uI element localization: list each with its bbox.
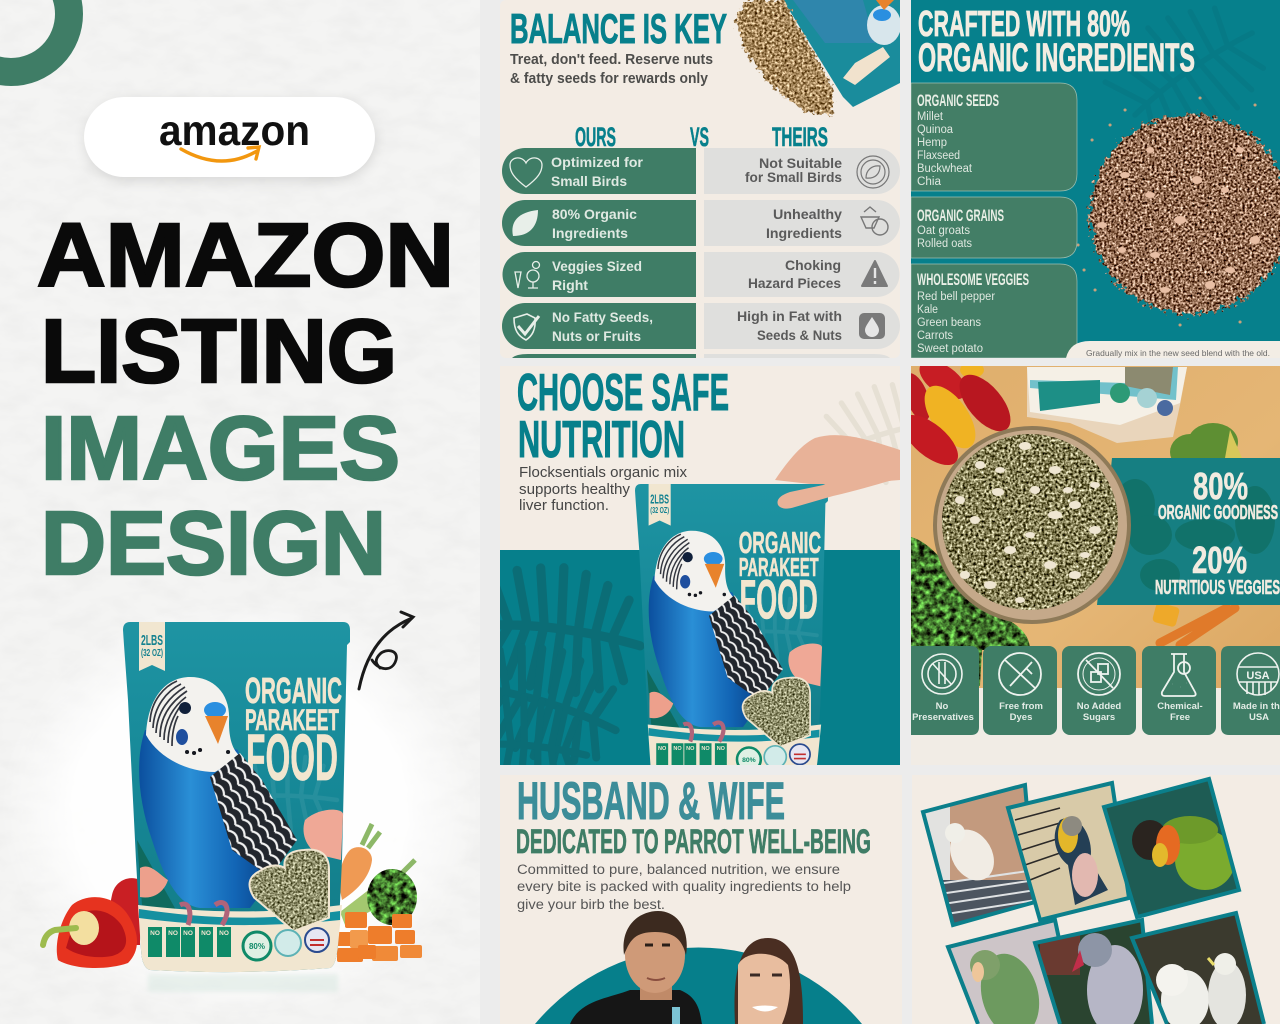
title: LISTING <box>41 302 397 402</box>
amazon wordmark: amazon <box>159 107 310 155</box>
arrow <box>359 612 413 689</box>
row 5 cut-off <box>512 354 890 358</box>
carrot <box>338 847 372 900</box>
panel background <box>500 0 900 358</box>
heading: CHOOSE SAFE <box>517 364 729 422</box>
card: no added sugars <box>1062 646 1136 735</box>
oats <box>955 442 1101 603</box>
palm shadows <box>462 558 649 800</box>
cream lower band <box>138 905 342 972</box>
weight tag: (32 OZ) <box>141 648 163 659</box>
box: wholesome veggies <box>911 264 1077 358</box>
parakeet <box>139 677 297 925</box>
feet <box>180 903 227 925</box>
body text: Flocksentials organic mix <box>519 465 688 481</box>
row 3 ours: Right <box>552 277 588 293</box>
pack title <box>245 670 342 794</box>
seed pile <box>735 0 834 115</box>
stats banner <box>1097 458 1280 605</box>
weight tag: 2LBS <box>141 632 163 649</box>
card: no preservatives <box>911 646 979 735</box>
body text: liver function. <box>519 498 609 514</box>
teal band <box>500 550 900 765</box>
pack title: ORGANIC <box>245 670 342 711</box>
red pepper behind <box>110 878 140 945</box>
head bars <box>150 681 187 746</box>
card: chemical-free: Free <box>1170 712 1190 723</box>
cere <box>204 702 226 718</box>
no-badge labels: NO <box>201 930 211 937</box>
panel background <box>911 0 1280 358</box>
ingredient list: Quinoa <box>917 124 954 136</box>
title: AMAZON <box>37 206 454 306</box>
veggie list <box>917 291 995 355</box>
icon: no bird <box>857 156 889 188</box>
body text: give your birb the best. <box>517 897 665 912</box>
row 4 ours: Nuts or Fruits <box>552 328 641 344</box>
ingredient list: Millet <box>917 111 944 123</box>
wing <box>210 753 297 877</box>
yellow pepper slice <box>1152 602 1180 628</box>
card: no added sugars: Sugars <box>1083 712 1115 723</box>
body text: every bite is packed with quality ingredients to help <box>517 879 851 894</box>
panel background <box>500 366 900 765</box>
box: organic grains: ORGANIC GRAINS <box>917 207 1004 225</box>
heading: BALANCE IS KEY <box>510 5 727 52</box>
row 2 ours: Ingredients <box>552 225 628 241</box>
ingredient list: Chia <box>917 176 942 188</box>
intro text: Treat, don't feed. Reserve nuts <box>510 52 713 68</box>
row 1 ours: Small Birds <box>551 173 627 189</box>
row 3 theirs: Hazard Pieces <box>748 275 841 291</box>
row 2 ours: 80% Organic <box>552 206 637 222</box>
card: free from dyes: Free from <box>999 701 1043 712</box>
card: made in the usa: USA <box>1249 712 1269 723</box>
grain list: Rolled oats <box>917 238 972 250</box>
row 4 ours: No Fatty Seeds, <box>552 309 653 325</box>
carrot top <box>362 824 415 880</box>
pack body <box>123 622 350 972</box>
icon: warning triangle <box>862 261 887 286</box>
kale <box>911 537 1030 686</box>
body text <box>517 862 851 912</box>
panel background <box>912 775 1280 1024</box>
body text <box>519 465 688 514</box>
icon: leaf <box>512 210 538 236</box>
title: IMAGES <box>41 399 400 499</box>
card: no added sugars: No Added <box>1077 701 1121 712</box>
carrot cubes <box>335 912 422 962</box>
throat spots <box>187 750 228 753</box>
veggie list: Kale <box>917 304 938 316</box>
no-badges <box>148 927 231 957</box>
eye <box>179 702 191 714</box>
box: organic seeds: ORGANIC SEEDS <box>917 92 999 110</box>
card: made in the usa: USA <box>1246 670 1270 682</box>
photo 5 <box>1030 915 1155 1024</box>
cream base <box>911 366 1280 765</box>
product pack copy <box>635 484 828 782</box>
pack title: PARAKEET <box>245 704 339 737</box>
panel: crafted with 80% <box>911 0 1280 358</box>
row 4 ours <box>502 303 696 349</box>
column headers: OURS <box>575 122 616 152</box>
stats text <box>1155 466 1280 599</box>
panel: choose safe nutrition <box>462 364 965 800</box>
faint palm <box>822 369 965 495</box>
seed bowl <box>933 426 1131 624</box>
row 1 theirs: for Small Birds <box>745 169 842 185</box>
teal circle <box>535 948 862 1024</box>
card: chemical-free: Chemical- <box>1157 701 1203 712</box>
card: no preservatives: Preservatives <box>912 712 974 723</box>
grain list: Oat groats <box>917 225 970 237</box>
heading <box>517 364 729 469</box>
heading: NUTRITION <box>518 411 685 469</box>
product pack <box>123 622 350 972</box>
row 4 theirs <box>704 303 900 349</box>
white glow behind pack <box>0 600 480 1020</box>
title: DESIGN <box>41 494 386 594</box>
ingredient list: Buckwheat <box>917 163 973 175</box>
row 1 theirs: Not Suitable <box>759 155 842 171</box>
box: organic grains <box>911 197 1077 258</box>
column headers: THEIRS <box>772 122 828 152</box>
no-badge labels: NO <box>168 930 178 937</box>
heart window <box>251 851 328 930</box>
intro text <box>510 52 713 87</box>
hibiscus right <box>303 810 343 860</box>
intro text: & fatty seeds for rewards only <box>510 71 708 87</box>
photo 4 <box>940 915 1080 1024</box>
broccoli <box>340 869 417 925</box>
weight tag <box>139 622 165 671</box>
icon: heart <box>510 158 542 187</box>
pill shadow <box>86 102 374 180</box>
oat flakes <box>1097 147 1260 293</box>
box: wholesome veggies: WHOLESOME VEGGIES <box>917 271 1029 289</box>
photo 1 <box>915 780 1045 930</box>
ingredient list <box>917 111 973 188</box>
icon: unhealthy bowl <box>861 207 888 235</box>
veggie list: Carrots <box>917 330 953 342</box>
footnote strip: Gradually mix in the new seed blend with the old. <box>1086 348 1270 358</box>
bag on table <box>1027 367 1187 443</box>
panel background <box>500 775 902 1024</box>
beak <box>205 716 228 744</box>
photo 2 <box>1000 780 1135 925</box>
ingredient list: Flaxseed <box>917 150 960 162</box>
husband <box>570 911 702 1024</box>
round seals <box>243 928 329 960</box>
card: made in the usa <box>1221 646 1280 735</box>
column headers <box>575 127 828 146</box>
panel: husband and wife <box>500 772 902 1024</box>
pack faint palms <box>216 748 337 845</box>
palm shadow <box>1094 0 1280 163</box>
broccoli <box>1170 423 1242 470</box>
drop <box>865 317 879 337</box>
row 1 theirs <box>704 148 900 194</box>
card: no preservatives: No <box>936 701 949 712</box>
heading: HUSBAND & WIFE <box>517 772 785 831</box>
seed mound <box>1078 98 1280 325</box>
scattered seeds <box>1078 98 1255 325</box>
panel: parrot photos <box>912 775 1280 1024</box>
paper texture <box>0 0 480 1024</box>
row 3 theirs <box>704 252 900 297</box>
hand back fingers <box>775 435 900 486</box>
pepper stem <box>43 928 76 945</box>
tropical leaves <box>137 840 176 910</box>
heading: CRAFTED WITH 80% <box>918 3 1130 44</box>
amazon smile <box>181 147 259 161</box>
card: chemical-free <box>1142 646 1216 735</box>
no-badge labels: NO <box>219 930 229 937</box>
stats text: 80% <box>1193 466 1248 508</box>
row 2 theirs: Unhealthy <box>773 206 842 222</box>
icon: fat drop <box>859 313 885 339</box>
amazon logo pill <box>84 97 375 177</box>
panel: balance is key <box>500 0 901 358</box>
veggie list: Red bell pepper <box>917 291 995 303</box>
warning mark <box>874 268 876 284</box>
veggie list: Green beans <box>917 317 981 329</box>
head <box>146 677 241 772</box>
body text: Committed to pure, balanced nutrition, we ensure <box>517 862 840 877</box>
icon: veggies <box>515 262 540 288</box>
row 3 ours: Veggies Sized <box>552 258 642 274</box>
round seals: 80% <box>249 942 265 951</box>
stats text: 20% <box>1192 540 1247 582</box>
body text: supports healthy <box>519 482 631 498</box>
pepper seeds core <box>69 911 99 945</box>
tilted pack corner <box>783 0 901 107</box>
row 4 theirs: High in Fat with <box>737 308 842 324</box>
row 1 ours: Optimized for <box>551 154 644 170</box>
icon: shield check <box>514 314 539 340</box>
pack reflection <box>148 974 338 992</box>
panel: bowl and stats <box>894 353 1280 765</box>
wood surface <box>911 366 1280 688</box>
no-badge labels: NO <box>150 930 160 937</box>
ingredient list: Hemp <box>917 137 947 149</box>
no-badge labels <box>150 930 229 937</box>
cut red pepper <box>43 897 137 968</box>
cheek patch <box>176 729 188 745</box>
row 3 ours <box>502 252 696 297</box>
paper background <box>0 0 480 1024</box>
grain list <box>918 226 972 247</box>
body <box>139 730 267 908</box>
title <box>37 206 454 594</box>
carrots <box>1160 608 1235 645</box>
column headers: VS <box>690 122 709 152</box>
footnote strip <box>1066 341 1280 358</box>
box: organic seeds <box>911 83 1077 191</box>
teal stripe <box>139 909 340 925</box>
row 4 theirs: Seeds & Nuts <box>757 327 842 343</box>
heart seed fill <box>251 851 328 930</box>
photo 6 <box>1125 905 1270 1024</box>
row 3 theirs: Choking <box>785 257 841 273</box>
no-badge labels: NO <box>183 930 193 937</box>
pack title: FOOD <box>246 720 338 794</box>
subheading: DEDICATED TO PARROT WELL-BEING <box>516 823 871 861</box>
panel: left hero <box>0 0 480 1024</box>
card: free from dyes: Dyes <box>1010 712 1032 723</box>
row 1 ours <box>502 148 696 194</box>
peppers <box>894 353 1020 474</box>
row 2 ours <box>502 200 696 246</box>
wife <box>734 938 803 1024</box>
decorative green ring <box>0 0 69 72</box>
card: free from dyes <box>983 646 1057 735</box>
heading <box>918 10 1194 72</box>
row 2 theirs: Ingredients <box>766 225 842 241</box>
banner produce overlay <box>1115 479 1275 591</box>
row 2 theirs <box>704 200 900 246</box>
hibiscus left <box>140 866 168 898</box>
photo 3 <box>1100 775 1245 920</box>
hand thumb <box>778 470 900 509</box>
veggie list: Sweet potato <box>917 343 983 355</box>
